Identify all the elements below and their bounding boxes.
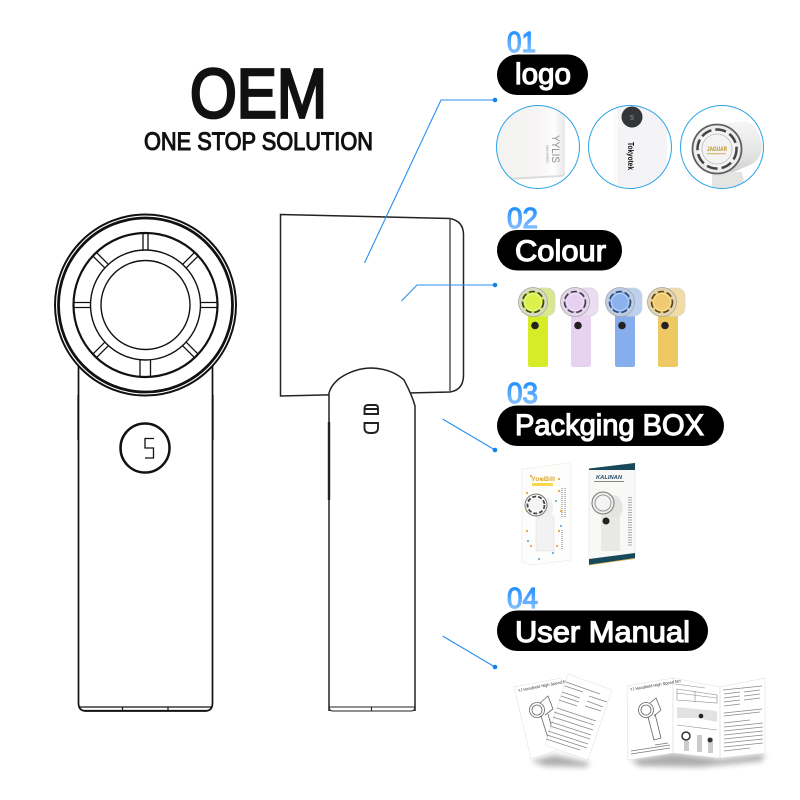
pill heading: logo <box>497 54 588 95</box>
section 04: user manual <box>497 583 765 767</box>
logo sample: Tokyotek: Tokyotek <box>626 142 635 170</box>
title: OEM: OEM <box>190 54 327 132</box>
number 03: 03 <box>507 378 538 410</box>
number 01: 01 <box>507 27 536 59</box>
logo sample: JAGUAR: JAGUAR <box>707 146 727 153</box>
leader lines <box>364 98 497 669</box>
section 01: logo <box>490 27 764 195</box>
side switch <box>364 405 378 433</box>
section 02: colour <box>497 203 685 367</box>
pill heading: colour: Colour <box>515 235 606 268</box>
side handle <box>329 368 415 711</box>
manual: folded sheets <box>514 674 612 767</box>
fan: lilac <box>560 288 598 367</box>
digit five <box>145 438 154 458</box>
subtitle: one stop solution: ONE STOP SOLUTION <box>144 128 373 156</box>
logo sample: YYLIS <box>496 105 580 189</box>
section 03: packaging box <box>497 378 724 565</box>
logo sample: YYLIS: HIGH SPEED <box>545 145 549 163</box>
pill heading: packging box <box>497 406 724 446</box>
fan spokes <box>74 234 218 376</box>
leader 01 <box>364 100 495 263</box>
box: Kalinan teal <box>589 463 635 565</box>
line drawing: front view of fan <box>55 214 236 711</box>
leader 04 <box>442 636 495 667</box>
fan: blue <box>606 288 642 367</box>
fan head rings <box>55 214 236 396</box>
box: Kalinan teal: KALINAN <box>596 475 622 481</box>
handle body front <box>78 365 212 711</box>
pill heading: user manual <box>497 610 708 651</box>
fan: lime <box>518 288 555 367</box>
box: YouBill confetti: YouBill <box>531 476 555 483</box>
manual: open booklet: YJ Handheld High Speed fan <box>629 678 681 692</box>
leader 03 <box>442 419 495 450</box>
pill heading: packging box: Packging BOX <box>515 409 704 442</box>
logo sample: Tokyotek <box>588 105 672 189</box>
side fan head <box>280 214 464 396</box>
logo sample: JAGUAR <box>680 105 764 192</box>
fan: yellow <box>648 288 685 367</box>
pill heading: user manual: User Manual <box>515 616 690 649</box>
logo sample: Tokyotek: 5 <box>630 115 634 122</box>
number 02: 02 <box>507 203 538 235</box>
pill heading: colour <box>497 230 622 270</box>
leader 02 <box>402 285 495 301</box>
manual: open booklet <box>627 678 765 767</box>
logo sample: YYLIS: YYLIS <box>549 135 561 163</box>
box: YouBill confetti <box>522 463 571 565</box>
pill heading: logo: logo <box>515 58 571 91</box>
line drawing: side view of fan <box>280 214 464 711</box>
manual: folded sheets: YJ Handheld High Speed fan <box>517 678 569 693</box>
number 04: 04 <box>507 583 538 615</box>
display button <box>120 424 170 472</box>
